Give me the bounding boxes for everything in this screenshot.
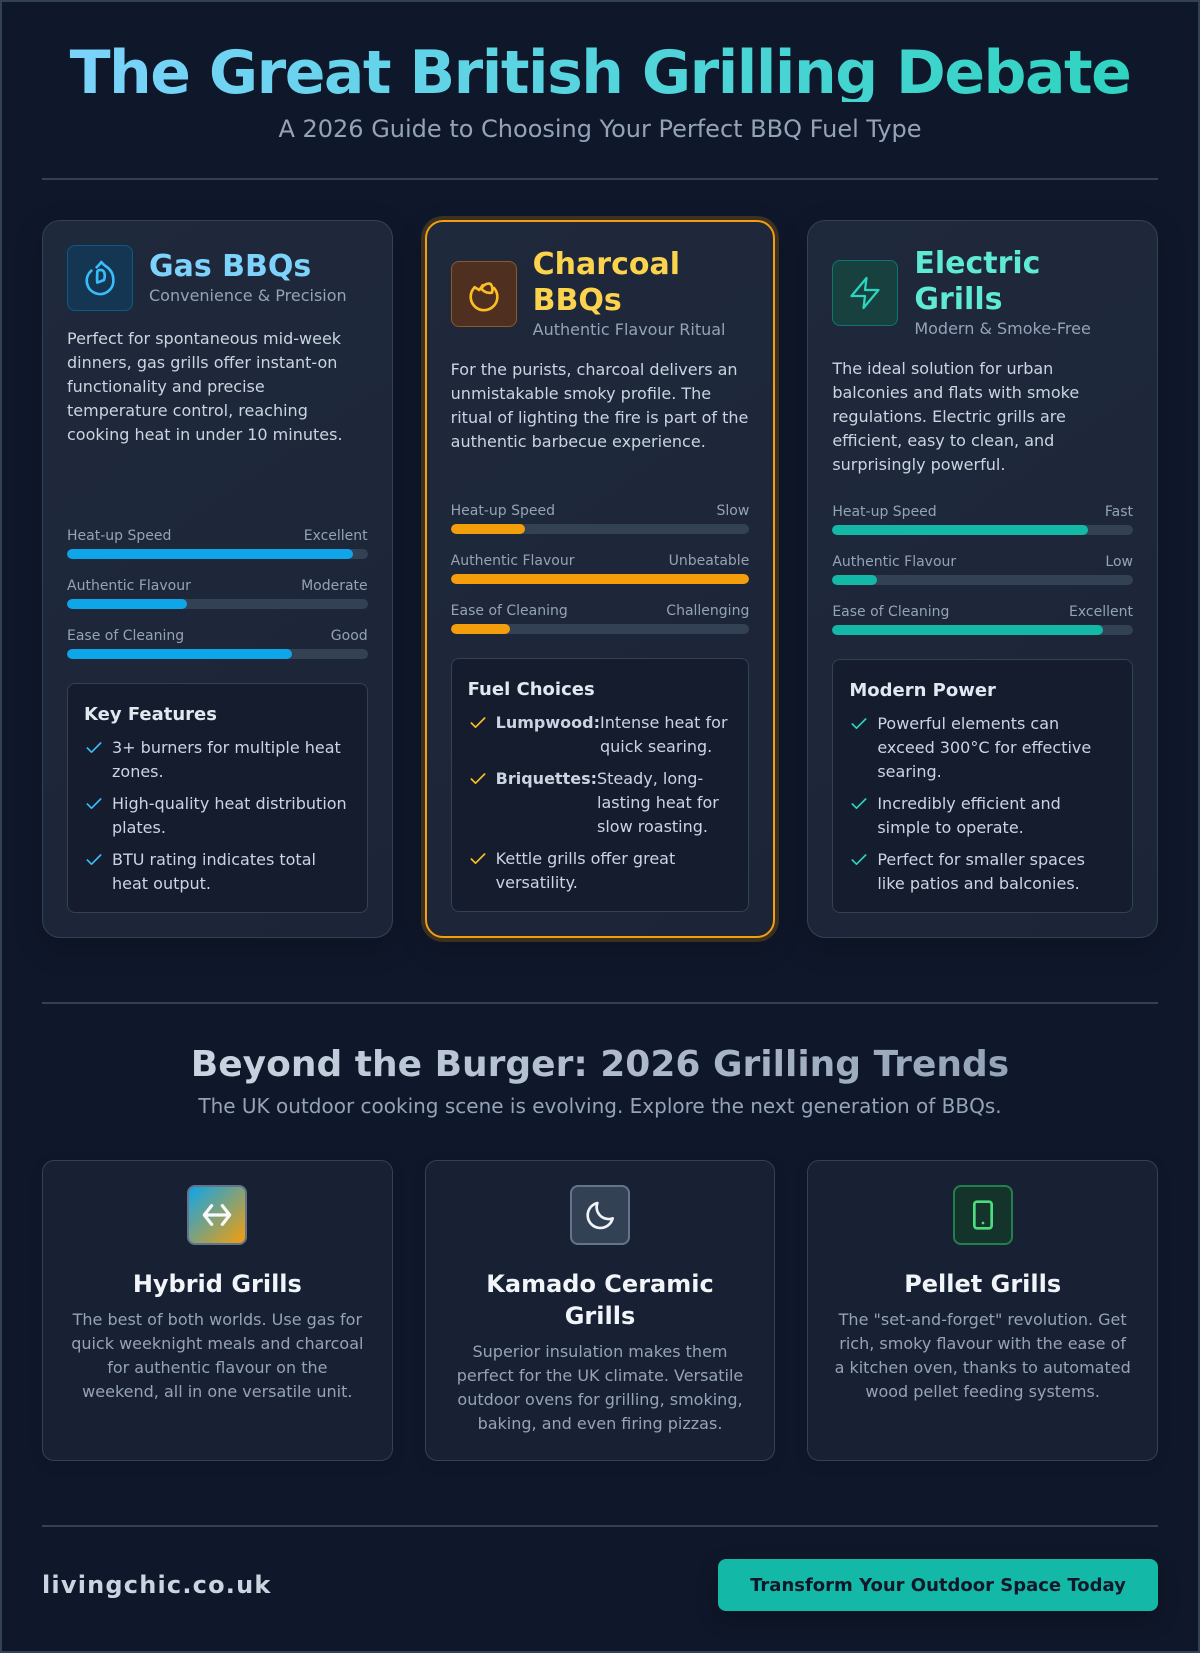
electric description: The ideal solution for urban balconies and flats with smoke regulations. Electric grills are efficient, easy to clean, and surprisingly powerful. bbox=[832, 359, 1079, 474]
charcoal ratings: Heat-up Speed bbox=[451, 503, 555, 519]
icon: gas flame bbox=[67, 245, 133, 311]
trend cards bbox=[42, 1160, 1158, 1461]
icon: smartphone bbox=[953, 1185, 1013, 1245]
electric heading: Electric Grills bbox=[914, 246, 1040, 317]
subtitle: A 2026 Guide to Choosing Your Perfect BBQ Fuel Type bbox=[278, 115, 922, 143]
electric modern power bbox=[832, 659, 1133, 913]
kamado text: Superior insulation makes them perfect for the UK climate. Versatile outdoor ovens for grilling, smoking, baking, and even firing pizzas. bbox=[457, 1342, 743, 1433]
charcoal fuel choices: Intense heat for quick searing. bbox=[600, 713, 728, 756]
title: The Great British Grilling Debate bbox=[70, 38, 1130, 108]
panel: pellet grills bbox=[807, 1160, 1158, 1461]
gas key features: 3+ burners for multiple heat zones. bbox=[112, 738, 341, 781]
charcoal fuel choices: Briquettes: bbox=[496, 769, 597, 788]
charcoal card header bbox=[451, 247, 725, 339]
pellet text: The "set-and-forget" revolution. Get rich, smoky flavour with the ease of a kitchen oven, thanks to automated wood pellet feeding systems. bbox=[835, 1310, 1131, 1401]
gas key features: High-quality heat distribution plates. bbox=[112, 794, 347, 837]
panel: charcoal BBQs bbox=[425, 220, 775, 938]
charcoal fuel choices: Kettle grills offer great versatility. bbox=[496, 849, 675, 892]
charcoal ratings bbox=[450, 503, 749, 634]
footer bbox=[42, 1559, 1158, 1612]
gas ratings: Ease of Cleaning bbox=[67, 628, 184, 644]
icon: charcoal ember bbox=[451, 261, 517, 327]
panel: hybrid grills bbox=[42, 1160, 393, 1461]
electric card header bbox=[832, 246, 1091, 338]
gas description: Perfect for spontaneous mid-week dinners, gas grills offer instant-on functionality and precise temperature control, reaching cooking heat in under 10 minutes. bbox=[67, 329, 343, 444]
gas heading: Gas BBQs bbox=[149, 249, 311, 284]
gas key features: BTU rating indicates total heat output. bbox=[112, 850, 316, 893]
electric modern power: Incredibly efficient and simple to operate. bbox=[877, 794, 1061, 837]
charcoal tagline: Authentic Flavour Ritual bbox=[533, 320, 725, 339]
icon: moon bbox=[570, 1185, 630, 1245]
call to action button: Transform Your Outdoor Space Today bbox=[750, 1575, 1126, 1596]
pellet heading: Pellet Grills bbox=[904, 1270, 1061, 1298]
electric ratings: Heat-up Speed bbox=[832, 504, 937, 520]
charcoal ratings: Challenging bbox=[666, 603, 749, 619]
gas ratings: Excellent bbox=[304, 528, 368, 544]
gas card header bbox=[67, 245, 347, 311]
charcoal fuel choices: Lumpwood: bbox=[496, 713, 600, 732]
gas key features: Key Features bbox=[84, 704, 217, 725]
gas tagline: Convenience & Precision bbox=[149, 286, 347, 305]
comparison cards bbox=[42, 216, 1158, 942]
gas ratings: Moderate bbox=[301, 578, 368, 594]
charcoal ratings: Unbeatable bbox=[669, 553, 749, 569]
electric ratings: Authentic Flavour bbox=[832, 554, 956, 570]
gas ratings: Heat-up Speed bbox=[67, 528, 171, 544]
charcoal fuel choices: Steady, long-lasting heat for slow roasting. bbox=[597, 769, 719, 836]
electric ratings: Low bbox=[1105, 554, 1133, 570]
hybrid text: The best of both worlds. Use gas for quick weeknight meals and charcoal for authentic flavour on the weekend, all in one versatile unit. bbox=[71, 1310, 363, 1401]
electric ratings: Fast bbox=[1105, 504, 1133, 520]
icon: lightning bolt bbox=[832, 260, 898, 326]
charcoal description: For the purists, charcoal delivers an unmistakable smoky profile. The ritual of lighting the fire is part of the authentic barbecue experience. bbox=[451, 360, 748, 451]
charcoal heading: Charcoal BBQs bbox=[533, 247, 680, 318]
trends heading: Beyond the Burger: 2026 Grilling Trends bbox=[191, 1044, 1009, 1085]
gas ratings: Authentic Flavour bbox=[67, 578, 191, 594]
gas ratings bbox=[67, 528, 368, 659]
charcoal ratings: Authentic Flavour bbox=[451, 553, 574, 569]
charcoal fuel choices: Fuel Choices bbox=[468, 679, 595, 700]
header bbox=[42, 42, 1158, 180]
electric ratings: Ease of Cleaning bbox=[832, 604, 949, 620]
gas key features bbox=[67, 683, 368, 913]
electric modern power: Perfect for smaller spaces like patios and balconies. bbox=[877, 850, 1085, 893]
hybrid heading: Hybrid Grills bbox=[133, 1270, 302, 1298]
brand name: livingchic.co.uk bbox=[42, 1571, 272, 1599]
trends intro: The UK outdoor cooking scene is evolving. Explore the next generation of BBQs. bbox=[198, 1094, 1002, 1118]
charcoal fuel choices bbox=[451, 658, 749, 912]
panel: electric grills bbox=[807, 220, 1158, 938]
charcoal ratings: Ease of Cleaning bbox=[451, 603, 568, 619]
panel: kamado grills bbox=[425, 1160, 775, 1461]
electric tagline: Modern & Smoke-Free bbox=[914, 319, 1091, 338]
electric modern power: Powerful elements can exceed 300°C for effective searing. bbox=[877, 714, 1091, 781]
electric modern power: Modern Power bbox=[849, 680, 996, 701]
charcoal ratings: Slow bbox=[717, 503, 749, 519]
kamado heading: Kamado Ceramic Grills bbox=[486, 1270, 714, 1330]
icon: hybrid arrows bbox=[187, 1185, 247, 1245]
trends heading bbox=[191, 1044, 1009, 1118]
electric ratings: Excellent bbox=[1069, 604, 1133, 620]
gas ratings: Good bbox=[331, 628, 368, 644]
electric ratings bbox=[832, 504, 1133, 635]
panel: gas BBQs bbox=[42, 220, 393, 938]
call to action button bbox=[718, 1559, 1158, 1611]
